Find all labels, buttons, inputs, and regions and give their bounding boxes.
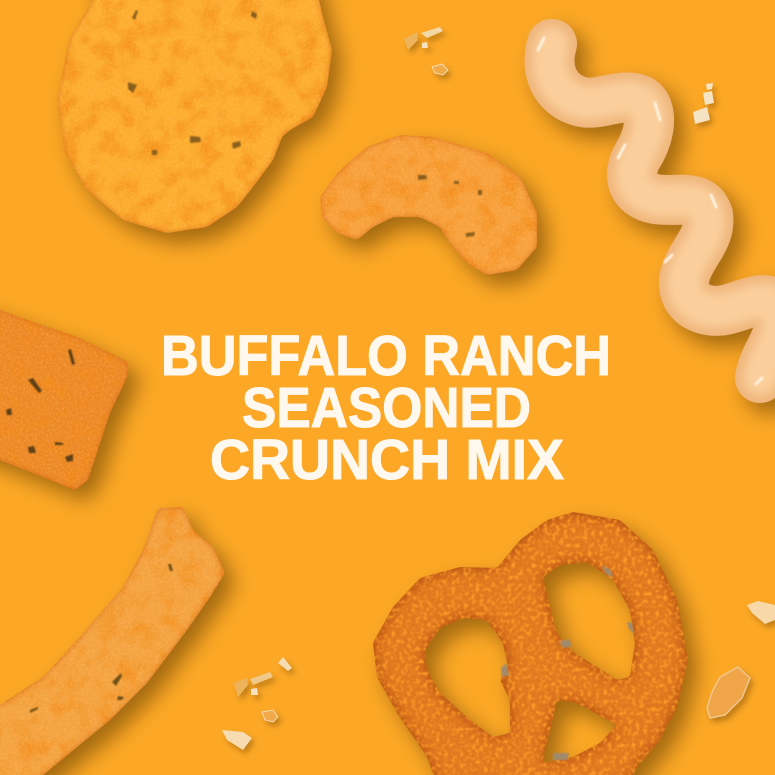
crumbs: bottom left: [222, 657, 292, 750]
crumbs: right: [707, 601, 775, 718]
title: CRUNCH MIX: [210, 428, 564, 492]
corn stick: [0, 507, 225, 775]
salt and herb specks on pretzel: [501, 566, 634, 760]
title: [161, 324, 611, 492]
title: SEASONED: [242, 376, 531, 440]
crumbs: top: [404, 27, 448, 75]
herb specks on chip: [128, 10, 257, 155]
herb specks on cracker: [6, 349, 75, 462]
cracker: [0, 300, 128, 490]
crumbs: by sauce: [693, 83, 714, 124]
sauce squiggle: [538, 38, 775, 384]
herb specks on stick: [30, 564, 173, 713]
round chip: [57, 0, 332, 233]
pretzel: [373, 512, 688, 775]
herb specks on cashew: [418, 175, 482, 237]
title: BUFFALO RANCH: [161, 324, 611, 388]
cashew: [320, 135, 537, 275]
sauce highlights: [538, 38, 762, 384]
